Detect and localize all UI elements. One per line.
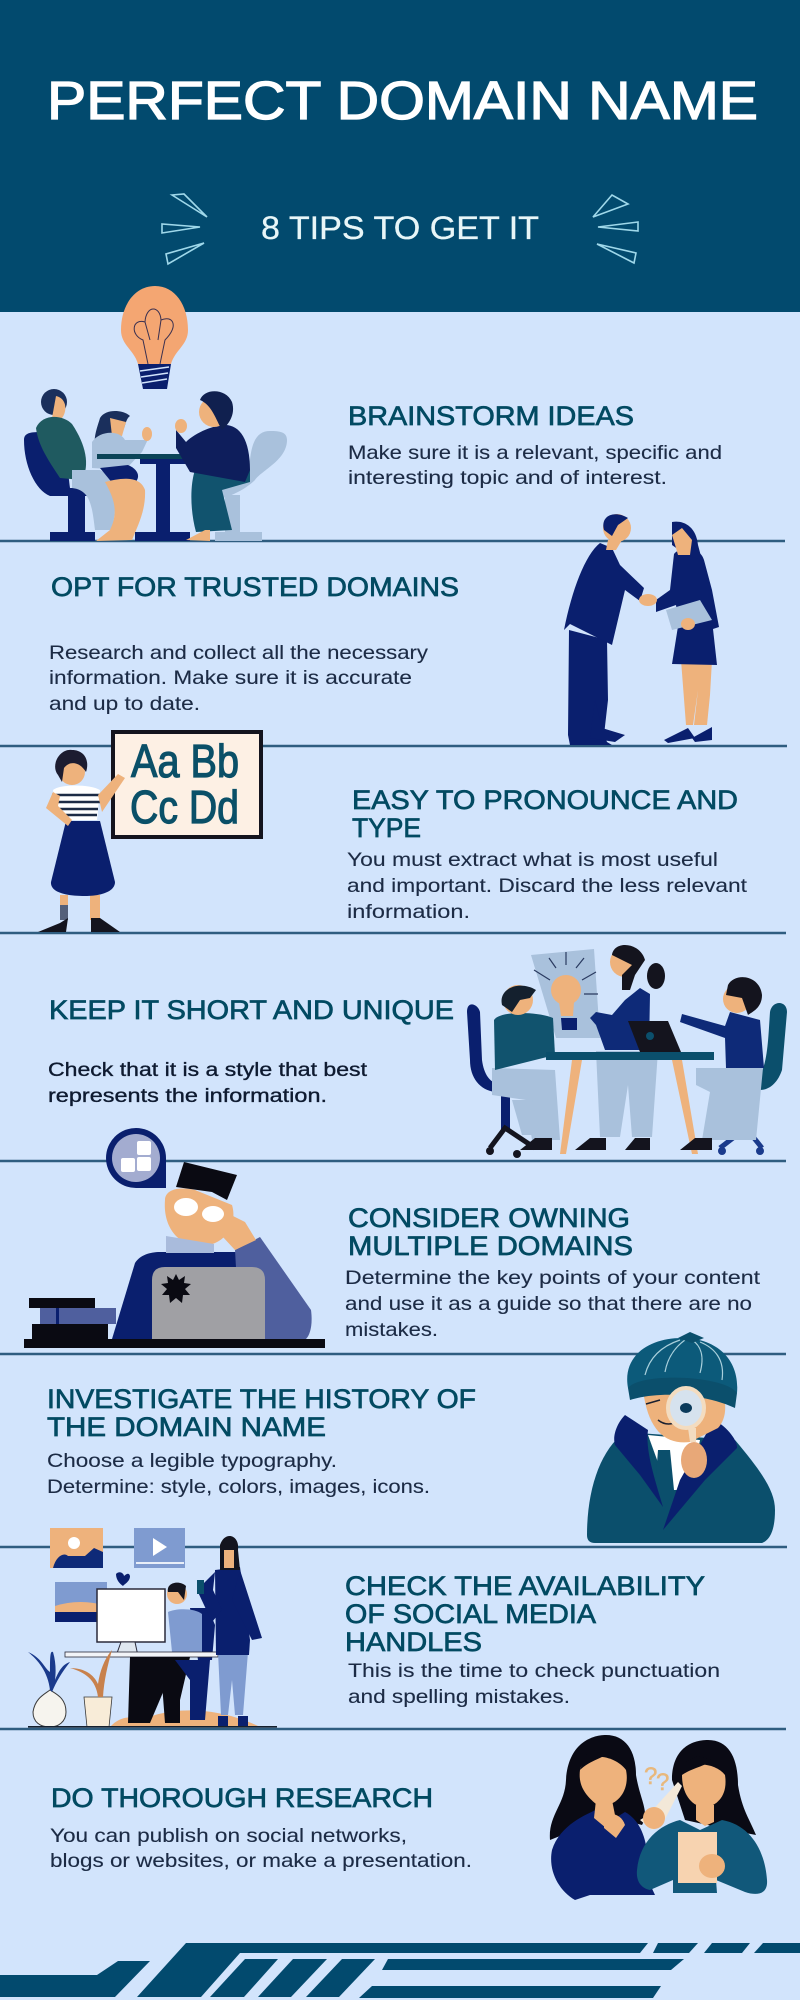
illustration: handshake (564, 514, 719, 745)
text block: easy to pronounce (347, 785, 748, 923)
text block: easy to pronounce: information. (347, 901, 470, 923)
footer geometric pattern (0, 1943, 800, 1998)
illustration: alphabet board (113, 732, 261, 837)
text block: short and unique (48, 995, 454, 1107)
heading: CONSIDER OWNING (348, 1203, 630, 1233)
body: You can publish on social networks, (50, 1825, 407, 1847)
illustration: two women thinking: ? (644, 1763, 657, 1790)
icon: left rays (162, 194, 207, 264)
body: Check that it is a style that best (48, 1059, 368, 1081)
text block: trusted domains (49, 572, 459, 715)
illustration: alphabet board: Aa Bb (131, 735, 239, 787)
heading: KEEP IT SHORT AND UNIQUE (49, 995, 454, 1025)
heading: INVESTIGATE THE HISTORY OF (47, 1384, 476, 1414)
text block: multiple domains (345, 1203, 761, 1341)
text block: history of the domain: THE DOMAIN NAME (47, 1412, 326, 1442)
icon: speech bubble (106, 1128, 166, 1188)
text block: trusted domains: and up to date. (49, 693, 200, 715)
text block: short and unique: represents the information. (48, 1085, 327, 1107)
title: PERFECT DOMAIN NAME (47, 71, 758, 131)
text block: easy to pronounce: TYPE (352, 813, 421, 843)
text block: social media handles: HANDLES (345, 1627, 482, 1657)
text block: history of the domain (47, 1384, 476, 1498)
illustration: teacher (38, 750, 125, 932)
text block: multiple domains: MULTIPLE DOMAINS (348, 1231, 633, 1261)
body: Research and collect all the necessary (49, 642, 428, 664)
heading: OPT FOR TRUSTED DOMAINS (51, 572, 459, 602)
body: Make sure it is a relevant, specific and (348, 442, 722, 464)
body: This is the time to check punctuation (348, 1660, 720, 1682)
header banner (0, 0, 800, 312)
illustration: social media workspace (28, 1528, 277, 1728)
illustration: brainstorm team at table (24, 389, 287, 541)
text block: brainstorm ideas (348, 401, 722, 489)
text block: thorough research (50, 1783, 472, 1872)
text block: social media handles: and spelling mistakes. (348, 1686, 570, 1708)
text block: trusted domains: information. Make sure it is accurate (49, 667, 412, 689)
heading: EASY TO PRONOUNCE AND (352, 785, 738, 815)
text block: history of the domain: Determine: style, colors, images, icons. (47, 1476, 430, 1498)
heading: DO THOROUGH RESEARCH (51, 1783, 433, 1813)
text block: multiple domains: mistakes. (345, 1319, 438, 1341)
text block: brainstorm ideas: interesting topic and of interest. (348, 467, 667, 489)
icon: light bulb (121, 286, 188, 389)
body: You must extract what is most useful (347, 849, 718, 871)
heading: CHECK THE AVAILABILITY (345, 1571, 705, 1601)
illustration: two women thinking: ? (656, 1769, 669, 1796)
illustration: two women thinking (550, 1735, 767, 1900)
body: Choose a legible typography. (47, 1450, 337, 1472)
text block: social media handles (345, 1571, 720, 1708)
text block: multiple domains: and use it as a guide so that there are no (345, 1293, 752, 1315)
text block: social media handles: OF SOCIAL MEDIA (345, 1599, 596, 1629)
illustration: alphabet board: Cc Dd (130, 781, 239, 833)
illustration: man at laptop (24, 1162, 325, 1348)
illustration: detective (587, 1332, 775, 1543)
illustration: team meeting (467, 945, 787, 1158)
subtitle: 8 TIPS TO GET IT (261, 210, 539, 246)
heading: BRAINSTORM IDEAS (348, 401, 634, 431)
body: Determine the key points of your content (345, 1267, 761, 1289)
text block: thorough research: blogs or websites, or make a presentation. (50, 1850, 472, 1872)
icon: right rays (593, 195, 638, 263)
text block: easy to pronounce: and important. Discard the less relevant (347, 875, 748, 897)
